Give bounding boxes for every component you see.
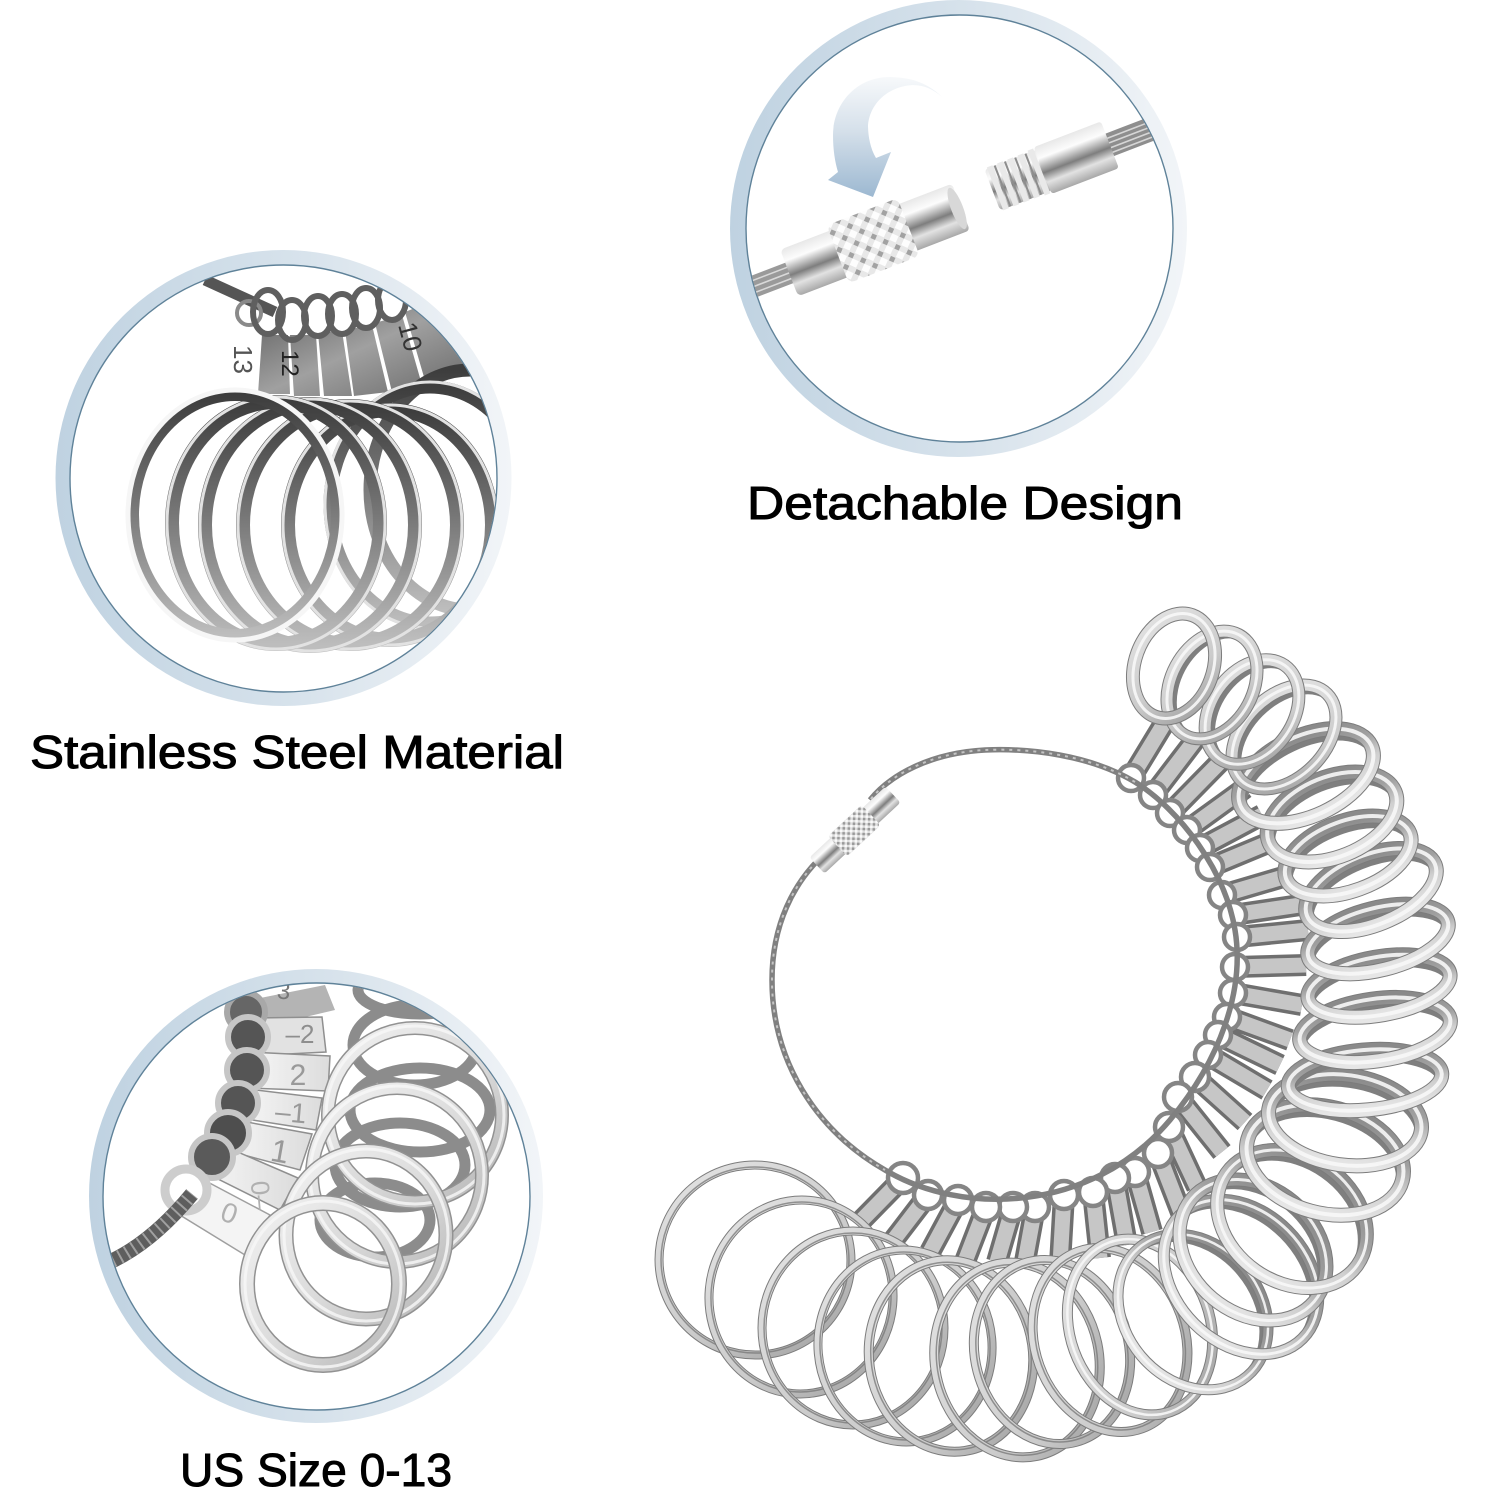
numbered size tabs: 2: [290, 1059, 306, 1092]
numbered size tabs: 0–: [245, 1180, 277, 1211]
inset border ring: [730, 0, 1187, 457]
heading: Detachable Design: Detachable Design: [747, 477, 1183, 529]
numbered size tabs: 3: [276, 977, 291, 1006]
inset border ring: [56, 250, 512, 706]
photo crop: numbered tabs and rings close-up: [105, 966, 504, 1367]
back arcs of rings: [320, 966, 490, 1257]
size rings: [245, 1026, 504, 1367]
numbered size tabs: –2: [286, 1019, 314, 1049]
clasp: threaded screw end on cable: [986, 120, 1154, 210]
wire clasp: [807, 784, 903, 876]
size tabs: 13: [228, 345, 258, 374]
photo crop: steel rings close-up: [126, 278, 496, 653]
size tabs: 12: [276, 350, 303, 377]
numbered size tabs: 1: [268, 1132, 292, 1170]
panel: stainless steel material inset: [56, 250, 512, 706]
heading: Stainless Steel Material: Stainless Steel Material: [30, 726, 564, 778]
main product: ring sizer set: [644, 602, 1455, 1473]
numbered size tabs: 0: [217, 1196, 242, 1230]
sizing rings: [644, 602, 1455, 1473]
panel: US size inset: [89, 966, 543, 1423]
steel cable: [205, 280, 275, 312]
numbered size tabs: –1: [274, 1096, 308, 1129]
size tabs: [234, 285, 463, 396]
numbered size tabs: [165, 977, 335, 1255]
size tabs on wire: [860, 722, 1308, 1267]
rings: [126, 364, 496, 653]
clasp: knurled barrel on cable: [752, 185, 969, 297]
steel wire loop: [772, 750, 1237, 1199]
panel: detachable design inset: [730, 0, 1187, 457]
inset border ring: [89, 969, 543, 1423]
steel cable: [105, 1194, 192, 1264]
size tabs: 10: [392, 319, 429, 354]
icon: curved twist arrow: [828, 77, 942, 197]
